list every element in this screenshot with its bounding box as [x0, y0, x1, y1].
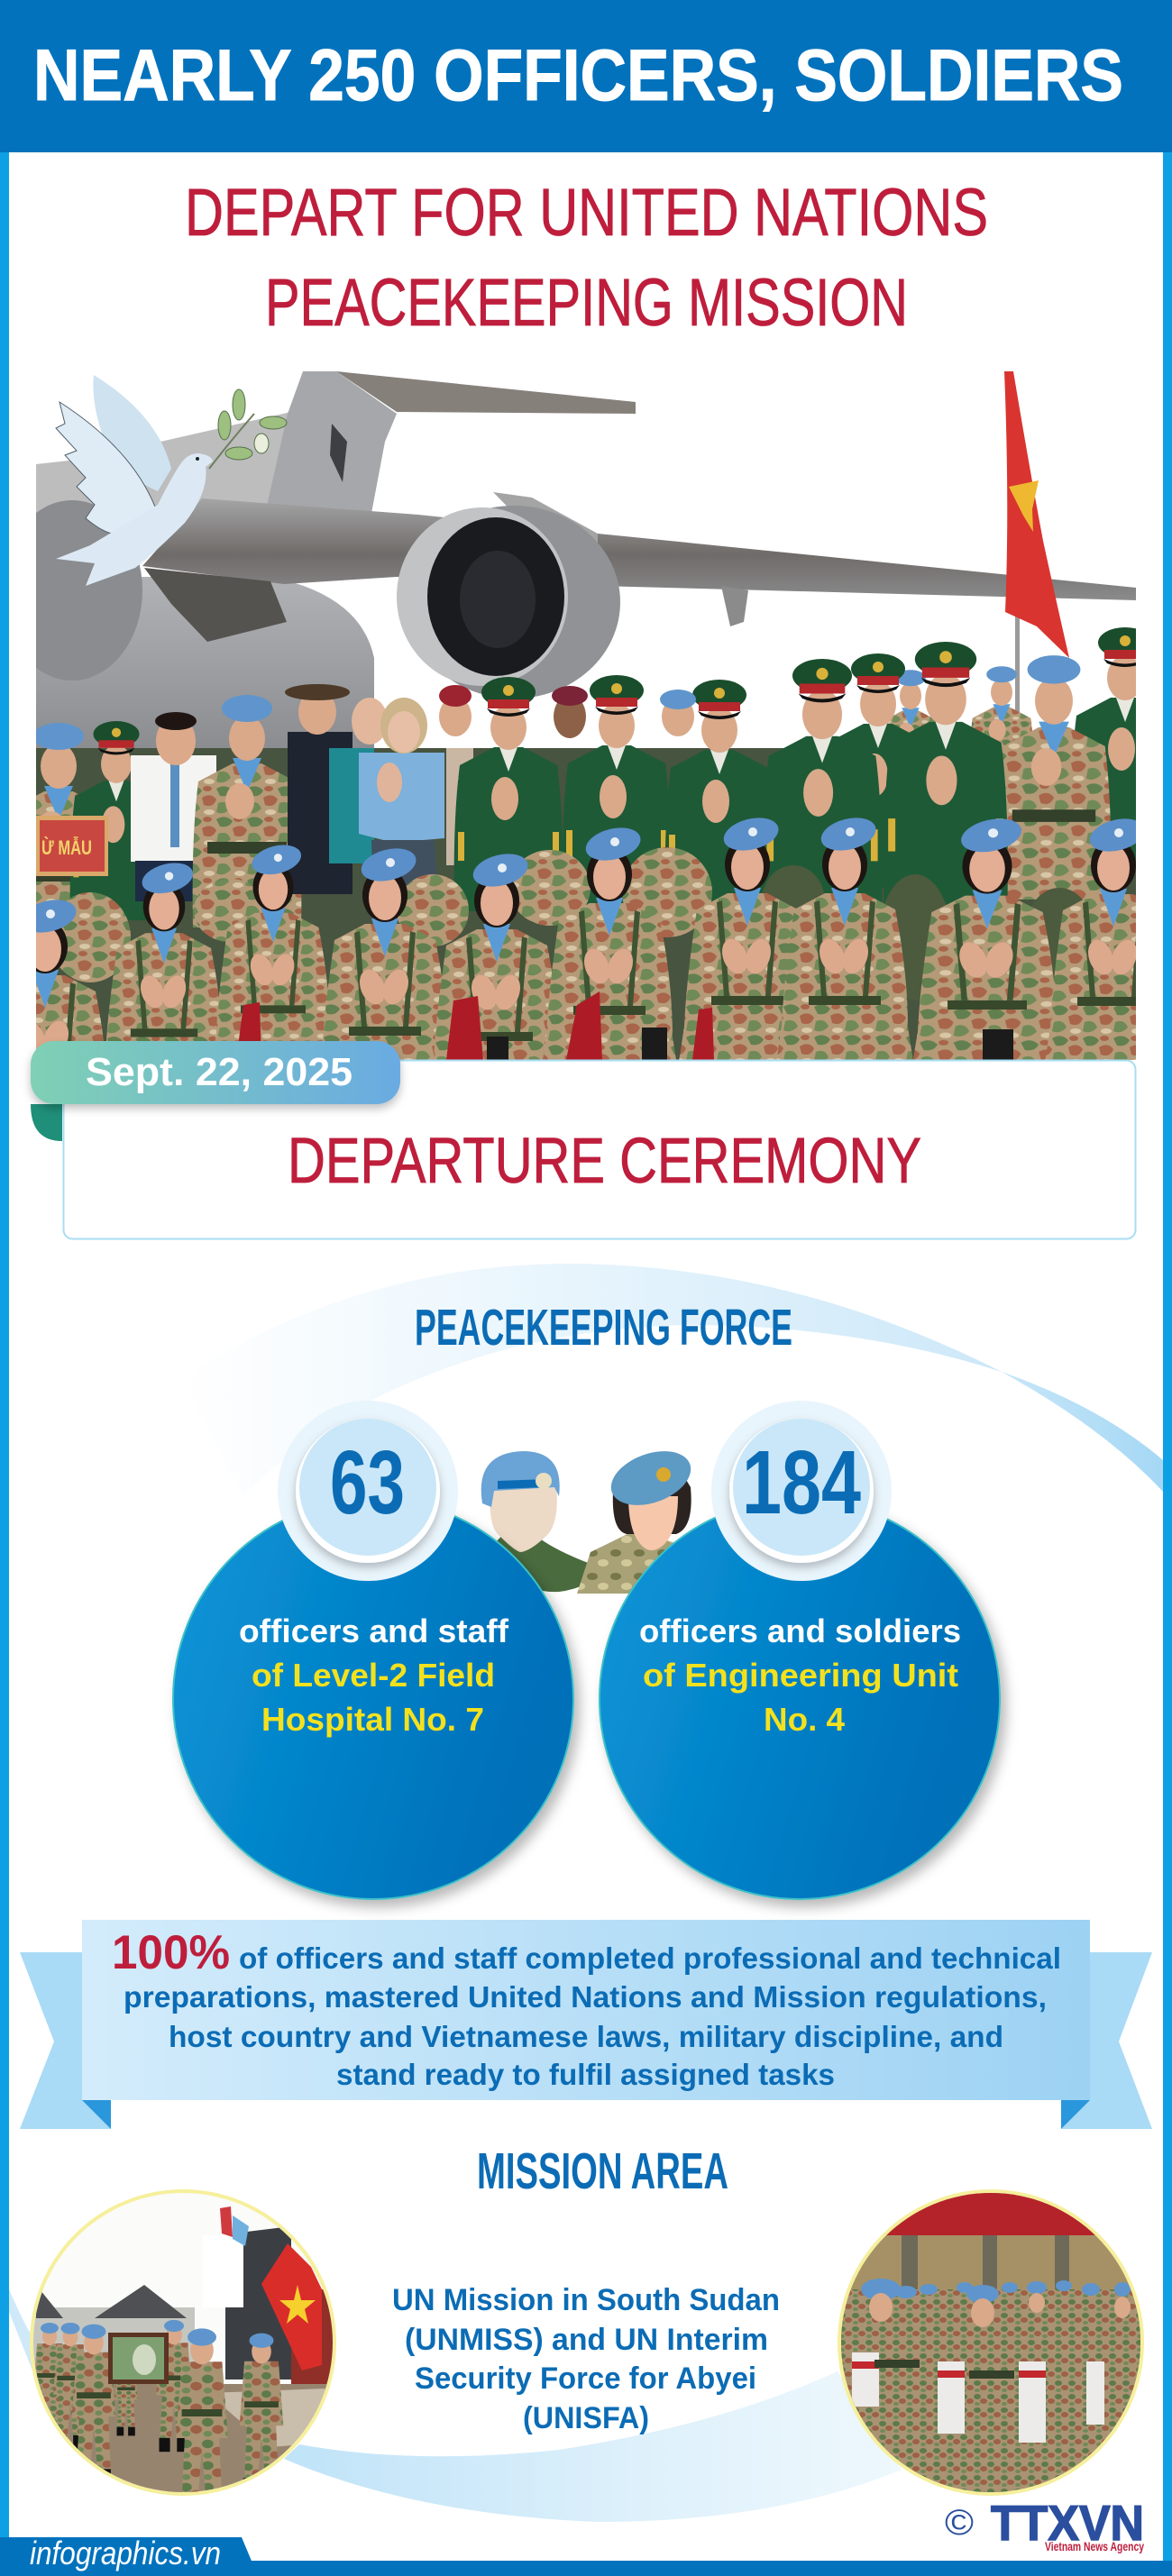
mission text: (UNMISS) and UN Interim — [405, 2323, 768, 2357]
mission text: Security Force for Abyei — [415, 2361, 756, 2396]
date tag — [31, 1041, 1136, 1238]
mission text: (UNISFA) — [523, 2401, 649, 2435]
date tag: Sept. 22, 2025 — [86, 1050, 353, 1094]
icon: male soldier — [481, 1451, 595, 1592]
icon: peace dove with olive branch — [56, 375, 287, 586]
section heading: peacekeeping force: PEACEKEEPING FORCE — [415, 1299, 792, 1357]
decorative swoosh: top — [180, 1264, 1163, 1496]
copyright and TTXVN logo: © — [945, 2503, 974, 2543]
placard: Ừ MẪU — [41, 836, 92, 859]
description — [639, 1612, 961, 1738]
footer bar — [0, 2535, 1172, 2576]
description: of Level-2 Field — [252, 1657, 495, 1694]
aircraft — [2, 371, 1136, 775]
ribbon banner — [20, 1920, 1152, 2129]
description: of Engineering Unit — [643, 1657, 958, 1694]
mission text: UN Mission in South Sudan — [392, 2283, 780, 2317]
banner text: of officers and staff completed professional and technical — [239, 1941, 1061, 1975]
badge: 184 — [711, 1401, 892, 1581]
subtitle — [185, 175, 988, 340]
Vietnamese flag — [1004, 371, 1069, 712]
header band — [0, 0, 1172, 152]
banner text: host country and Vietnamese laws, military discipline, and — [169, 2020, 1003, 2053]
placard — [36, 816, 108, 876]
banner text: preparations, mastered United Nations and Mission regulations, — [124, 1980, 1047, 2014]
section heading: mission area: MISSION AREA — [477, 2142, 728, 2200]
icon: female soldier — [577, 1441, 698, 1594]
copyright and TTXVN logo: TTXVN — [991, 2495, 1144, 2551]
description: officers and staff — [239, 1612, 509, 1649]
kneeling row — [0, 813, 1172, 1190]
panel: 63 officers and staff — [173, 1401, 573, 1899]
banner text — [112, 1926, 1061, 2091]
badge: 63: 63 — [330, 1432, 405, 1533]
description: officers and soldiers — [639, 1612, 961, 1649]
panel: 184 officers and soldiers — [600, 1401, 1000, 1899]
description: No. 4 — [764, 1701, 845, 1738]
mission text — [392, 2283, 780, 2435]
photo: soldiers marching with flag — [30, 2189, 336, 2496]
description — [239, 1612, 509, 1738]
badge: 63 — [278, 1401, 458, 1581]
boots — [487, 1028, 1013, 1060]
ceremony box: DEPARTURE CEREMONY — [288, 1126, 921, 1197]
subtitle: DEPART FOR UNITED NATIONS — [185, 175, 988, 250]
subtitle: PEACEKEEPING MISSION — [265, 265, 908, 340]
hero photo: troops in front of aircraft — [36, 371, 1136, 1060]
standing back row — [5, 627, 1172, 1064]
photo: soldiers standing in hall — [838, 2189, 1145, 2497]
decorative swoosh: bottom — [9, 2289, 902, 2522]
red carpet — [236, 991, 714, 1060]
site name: infographics.vn — [30, 2535, 221, 2571]
ceremony box — [63, 1060, 1136, 1238]
description: Hospital No. 7 — [261, 1701, 484, 1738]
banner text: stand ready to fulfil assigned tasks — [336, 2058, 835, 2091]
badge: 184: 184 — [742, 1432, 861, 1533]
banner text: 100% — [112, 1926, 230, 1979]
